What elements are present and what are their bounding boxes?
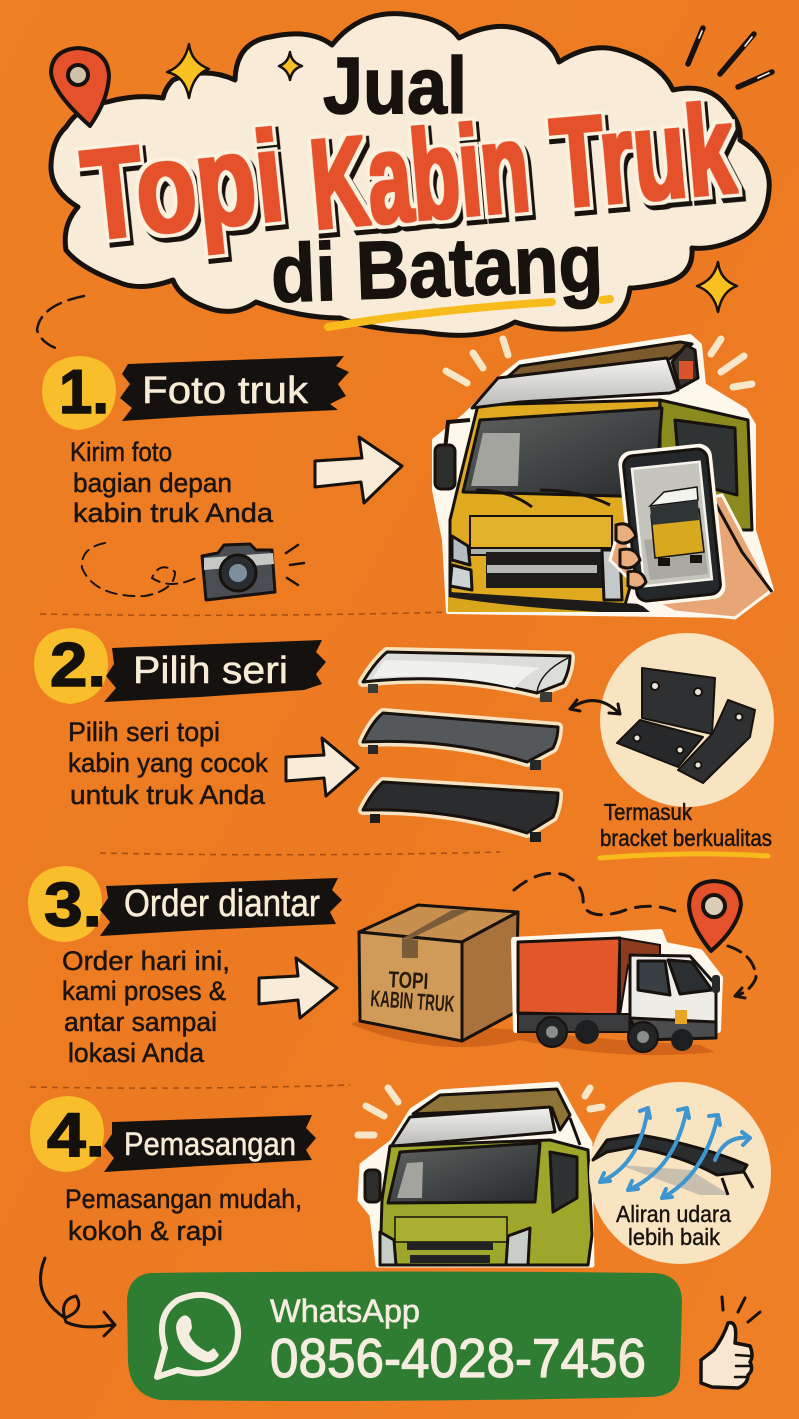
airflow caption: Aliran udara xyxy=(616,1201,731,1227)
product: black roof visor xyxy=(363,782,558,842)
product: grey roof visor xyxy=(363,713,558,770)
green truck xyxy=(360,1084,592,1265)
panel: whatsapp contact xyxy=(127,1272,682,1401)
cab side green xyxy=(660,400,752,530)
title line: di Batang: di Batang xyxy=(269,217,604,320)
step 1 banner: Foto truk xyxy=(142,370,309,412)
step 1 text: Kirim foto xyxy=(70,437,172,467)
green truck rays xyxy=(358,1088,602,1135)
arrow 2 xyxy=(286,738,358,796)
icon: burst strokes xyxy=(688,28,772,87)
icon: location pin top xyxy=(51,48,109,126)
phone number: 0856-4028-7456 xyxy=(270,1327,646,1389)
yellow underline xyxy=(328,299,610,327)
step 4 text xyxy=(65,1184,302,1246)
fingers xyxy=(616,524,646,588)
step 3 text: antar sampai xyxy=(64,1007,217,1037)
step 2 text: untuk truk Anda xyxy=(70,780,266,810)
step 2 text: kabin yang cocok xyxy=(68,748,268,778)
step 4 text: Pemasangan mudah, xyxy=(65,1184,302,1214)
step 1 text: bagian depan xyxy=(73,468,232,498)
dashed route to pin xyxy=(514,873,680,915)
illustration: truck with phone xyxy=(434,336,772,618)
step 2 badge: 2. xyxy=(50,631,106,700)
step 3 text: lokasi Anda xyxy=(68,1038,205,1068)
title line: Jual: Jual xyxy=(323,41,467,130)
phone xyxy=(617,443,727,607)
title line: Topi Kabin Truk: Topi xyxy=(76,105,290,268)
marker box xyxy=(672,345,698,388)
step 2 text xyxy=(68,717,268,810)
panel: step 3 xyxy=(28,866,756,1068)
bracket caption: Termasuk xyxy=(604,799,692,825)
phone screen xyxy=(632,462,712,586)
dashed curve top left xyxy=(37,296,84,350)
arrow 1 xyxy=(315,437,402,503)
title line: Topi Kabin Truk: Kabin xyxy=(305,95,535,257)
phone truck xyxy=(651,509,704,558)
step 1 text: kabin truk Anda xyxy=(73,498,274,528)
icon: camera xyxy=(202,544,304,600)
green truck windshield xyxy=(388,1143,540,1203)
truck shine rays xyxy=(446,339,752,387)
roof top xyxy=(500,342,692,382)
whatsapp label: WhatsApp xyxy=(270,1293,420,1329)
headlights xyxy=(452,536,470,565)
step 2 banner xyxy=(104,640,326,702)
icon: sparkles xyxy=(167,44,737,312)
panel: step 4 xyxy=(30,1082,771,1265)
visor white xyxy=(472,358,678,408)
windshield xyxy=(463,408,662,497)
icon: airflow visor xyxy=(593,1108,753,1198)
step 4 badge xyxy=(30,1096,105,1172)
airflow caption: lebih baik xyxy=(628,1224,720,1250)
icon: location pin xyxy=(689,881,741,951)
airflow circle xyxy=(589,1082,771,1264)
step 1 badge: 1. xyxy=(59,358,109,427)
bracket circle xyxy=(600,633,774,807)
step 4 banner: Pemasangan xyxy=(124,1126,296,1162)
step 2 banner: Pilih seri xyxy=(133,650,288,692)
dashed return arrow xyxy=(728,946,756,998)
step 1 text xyxy=(70,437,274,528)
step 3 badge xyxy=(28,866,102,942)
box label: TOPI xyxy=(388,966,429,994)
curved arrow to bracket xyxy=(570,700,620,714)
icon: bracket xyxy=(617,668,755,783)
step 4 badge: 4. xyxy=(47,1101,105,1170)
airflow caption xyxy=(616,1201,731,1250)
squiggle arrow to contact xyxy=(40,1258,115,1336)
grille xyxy=(470,516,612,552)
step 3 text xyxy=(62,946,230,1068)
step 3 banner xyxy=(100,878,342,936)
title line: Topi Kabin Truk xyxy=(76,78,740,268)
icon: whatsapp xyxy=(157,1295,238,1377)
mirror xyxy=(445,420,470,450)
bracket caption xyxy=(600,799,772,858)
delivery truck xyxy=(514,932,720,1052)
product: white roof visor xyxy=(363,652,570,702)
dashed trail to camera xyxy=(82,543,196,596)
step 3 banner: Order diantar xyxy=(124,883,320,925)
step 1 banner xyxy=(120,356,349,421)
step 4 text: kokoh & rapi xyxy=(68,1216,223,1246)
box label: KABIN TRUK xyxy=(370,985,455,1017)
bumper xyxy=(448,592,650,612)
title cloud xyxy=(51,14,769,335)
cardboard box xyxy=(359,905,518,1041)
step 2 text: Pilih seri topi xyxy=(68,717,220,747)
hand xyxy=(610,495,772,618)
bracket caption: bracket berkualitas xyxy=(600,825,772,851)
step 4 banner xyxy=(104,1115,316,1172)
box label xyxy=(370,966,455,1017)
cab front yellow xyxy=(450,400,660,605)
arrow 3 xyxy=(259,958,337,1018)
step 2 badge xyxy=(34,628,108,704)
panel: step 2 xyxy=(34,628,774,858)
truck white halo xyxy=(434,336,772,616)
step 1 badge xyxy=(42,356,116,430)
step 3 text: kami proses & xyxy=(62,976,226,1006)
ground shadows xyxy=(350,1020,715,1055)
step 3 badge: 3. xyxy=(44,871,102,940)
panel: step 1 xyxy=(42,336,772,618)
icon: thumbs up xyxy=(701,1297,760,1388)
step 3 text: Order hari ini, xyxy=(62,946,230,976)
